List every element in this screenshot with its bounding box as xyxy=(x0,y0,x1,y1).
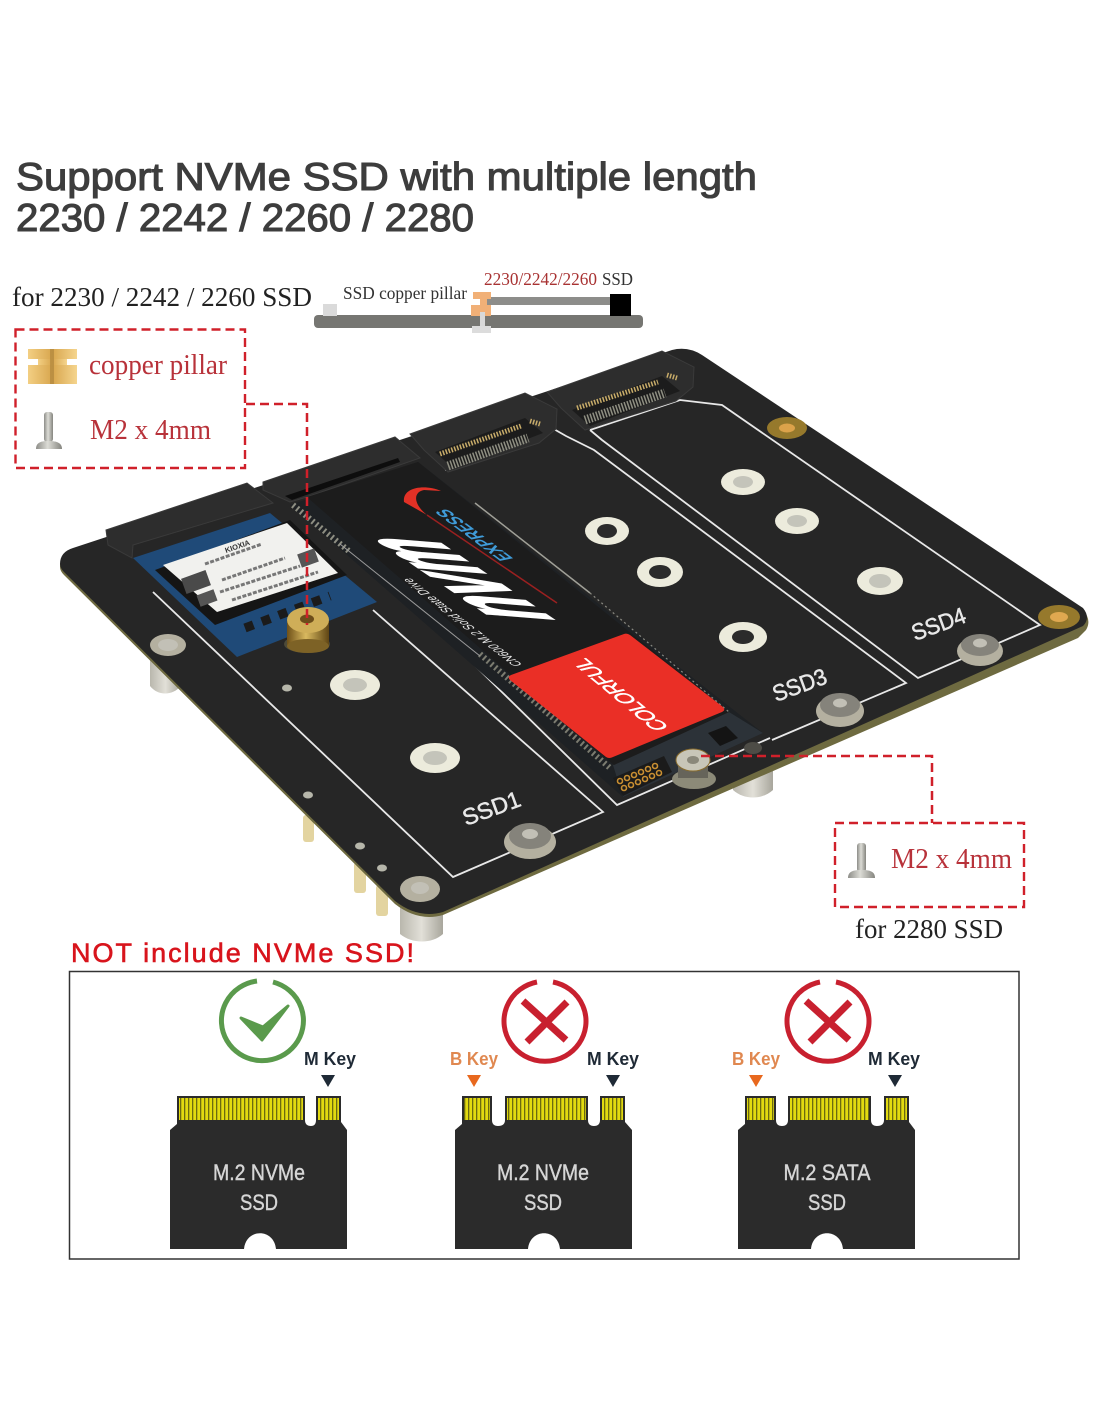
SSD: small Kioxia 2230 module xyxy=(133,513,377,657)
silkscreen labels: SSD1 xyxy=(459,786,524,831)
red dashed leader: pillar callout xyxy=(246,404,307,625)
icon: red cross 2 xyxy=(787,982,869,1061)
title xyxy=(16,156,757,240)
drive label art xyxy=(404,487,441,515)
gold corner holes xyxy=(767,417,1080,629)
icon: screw xyxy=(36,412,62,449)
legend box: copper pillar and screw: copper pillar xyxy=(89,349,227,381)
SSD: NVMe 2280 drive: nvm xyxy=(324,532,585,624)
SSD: small Kioxia 2230 module: KIOXIA xyxy=(224,538,252,555)
title: Support NVMe SSD with multiple length xyxy=(16,156,757,199)
SSD card: M.2 NVMe, B+M key: SSD xyxy=(524,1190,562,1215)
SSD: NVMe 2280 drive: EXPRESS xyxy=(431,507,519,562)
B key and M key labels 2 xyxy=(732,1049,920,1087)
warning heading: NOT include NVMe SSD! xyxy=(71,938,414,968)
standoff screws xyxy=(150,634,1003,902)
edge pads and chip xyxy=(613,756,672,796)
SSD card: M.2 SATA, B+M key xyxy=(738,1096,915,1249)
header pins xyxy=(303,815,388,916)
legend box: copper pillar and screw xyxy=(16,330,245,468)
board body xyxy=(60,351,1088,917)
SSD card: M.2 SATA, B+M key: M.2 SATA xyxy=(784,1160,871,1185)
panel: M.2 key compatibility xyxy=(70,972,1019,1259)
small vias xyxy=(282,684,387,872)
M key label: M Key xyxy=(304,1049,356,1069)
mounting holes xyxy=(330,469,903,773)
legend box: copper pillar and screw: M2 x 4mm xyxy=(90,414,211,446)
drive screw xyxy=(672,769,716,789)
label: for 2230 / 2242 / 2260 SSD: for 2230 / 2242 / 2260 SSD xyxy=(12,282,312,312)
M key label xyxy=(304,1049,356,1087)
slot outlines xyxy=(153,400,1040,877)
B key and M key labels 2: B Key xyxy=(732,1049,780,1069)
icon: red cross 1 xyxy=(504,982,586,1061)
silkscreen labels xyxy=(459,602,970,831)
icon: copper pillar xyxy=(28,349,77,384)
B key and M key labels 1: M Key xyxy=(587,1049,639,1069)
callout: 2280 screw xyxy=(835,823,1024,907)
standoff legs xyxy=(150,660,773,942)
SSD: NVMe 2280 drive: CN600 M.2 Solid State Drive xyxy=(398,577,526,667)
side-view mounting diagram: SSD xyxy=(602,269,633,289)
SSD card: M.2 SATA, B+M key: SSD xyxy=(808,1190,846,1215)
SSD card: M.2 NVMe, B+M key: M.2 NVMe xyxy=(497,1160,589,1185)
circuit board photo xyxy=(60,349,1088,942)
copper pillar on board xyxy=(284,607,330,653)
SSD: NVMe 2280 drive: COLORFUL xyxy=(565,656,675,733)
SSD card: M.2 NVMe, B+M key xyxy=(455,1096,632,1249)
side-view mounting diagram: 2230/2242/2260 xyxy=(484,269,597,289)
label: for 2280 SSD: for 2280 SSD xyxy=(855,914,1003,944)
M.2 connectors xyxy=(106,351,694,558)
side-view mounting diagram xyxy=(314,269,643,333)
B key and M key labels 2: M Key xyxy=(868,1049,920,1069)
title: 2230 / 2242 / 2260 / 2280 xyxy=(16,197,474,240)
callout: 2280 screw: M2 x 4mm xyxy=(891,843,1012,875)
silkscreen labels: SSD4 xyxy=(908,602,970,646)
silkscreen labels: SSD3 xyxy=(769,663,830,707)
SSD card: M.2 NVMe, M key: SSD xyxy=(240,1190,278,1215)
icon: green check xyxy=(221,981,303,1061)
SSD: NVMe 2280 drive xyxy=(290,462,763,797)
B key and M key labels 1 xyxy=(450,1049,639,1087)
SSD card: M.2 NVMe, M key: M.2 NVMe xyxy=(213,1160,305,1185)
red dashed leader: 2280 screw callout xyxy=(701,756,932,823)
SSD card: M.2 NVMe, M key xyxy=(170,1096,347,1249)
B key and M key labels 1: B Key xyxy=(450,1049,498,1069)
side-view mounting diagram: SSD copper pillar xyxy=(343,283,467,303)
